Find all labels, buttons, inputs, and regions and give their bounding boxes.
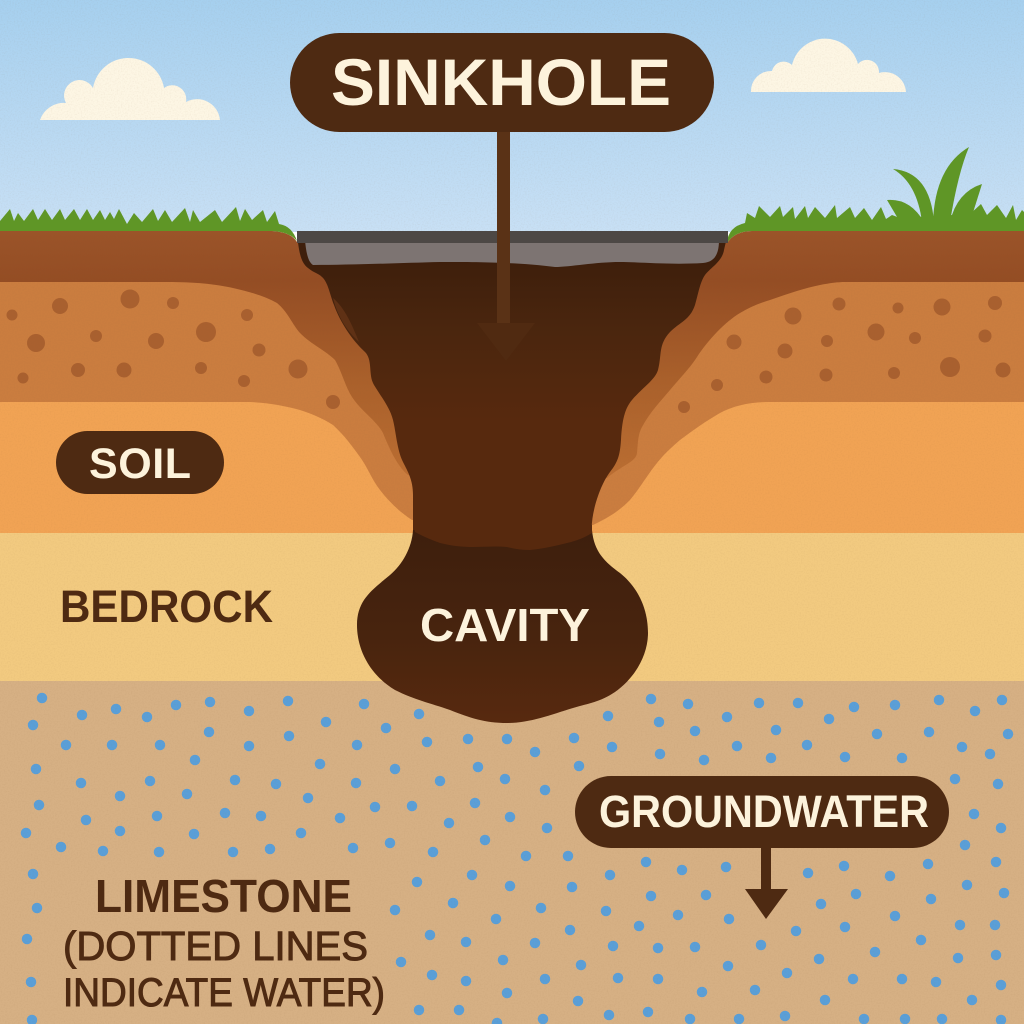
cavity lower chamber bbox=[357, 530, 648, 723]
title text: SINKHOLE bbox=[331, 45, 671, 119]
sandy soil layer bbox=[0, 402, 1024, 533]
limestone label: LIMESTONE bbox=[95, 870, 352, 922]
right leaf bbox=[950, 184, 982, 222]
groundwater text: GROUNDWATER bbox=[599, 786, 929, 837]
title pill bbox=[290, 33, 714, 132]
arrow bbox=[745, 846, 788, 919]
small leaf bbox=[887, 200, 924, 222]
note line two: INDICATE WATER) bbox=[63, 971, 385, 1015]
grass strip bbox=[727, 204, 1024, 243]
sinkhole shaft and cavity bbox=[297, 235, 727, 723]
pill bbox=[575, 776, 949, 848]
soil text: SOIL bbox=[89, 440, 191, 488]
grass right with tuft bbox=[727, 147, 1024, 243]
soil label bbox=[56, 431, 224, 494]
water dots bbox=[26, 698, 1008, 1023]
arrow stem bbox=[497, 130, 510, 325]
shaft lower lip bbox=[413, 525, 592, 550]
title arrow bbox=[477, 130, 535, 361]
arrow head bbox=[477, 323, 535, 361]
lower gray bbox=[305, 240, 719, 267]
left leaf bbox=[893, 169, 934, 222]
cloud right bbox=[751, 39, 906, 92]
cloud left bbox=[40, 58, 220, 120]
upper dark gray bbox=[297, 231, 728, 243]
gray pavement collapse band bbox=[297, 231, 728, 267]
grass left bbox=[0, 207, 297, 241]
cavity label: CAVITY bbox=[420, 599, 590, 651]
sky background bbox=[0, 0, 1024, 232]
limestone layer bbox=[0, 681, 1024, 1024]
groundwater label with arrow bbox=[575, 776, 949, 919]
tall leaf bbox=[933, 147, 969, 222]
bedrock label: BEDROCK bbox=[60, 581, 273, 632]
topsoil layer bbox=[0, 231, 1024, 533]
fold shading bbox=[333, 298, 359, 342]
pebbly subsoil layer bbox=[0, 282, 1024, 533]
hole body bbox=[297, 235, 727, 533]
bedrock layer bbox=[0, 533, 1024, 681]
note line one: (DOTTED LINES bbox=[63, 923, 368, 969]
limestone label bbox=[63, 870, 385, 1015]
pebbles in subsoil bbox=[6, 290, 1010, 413]
